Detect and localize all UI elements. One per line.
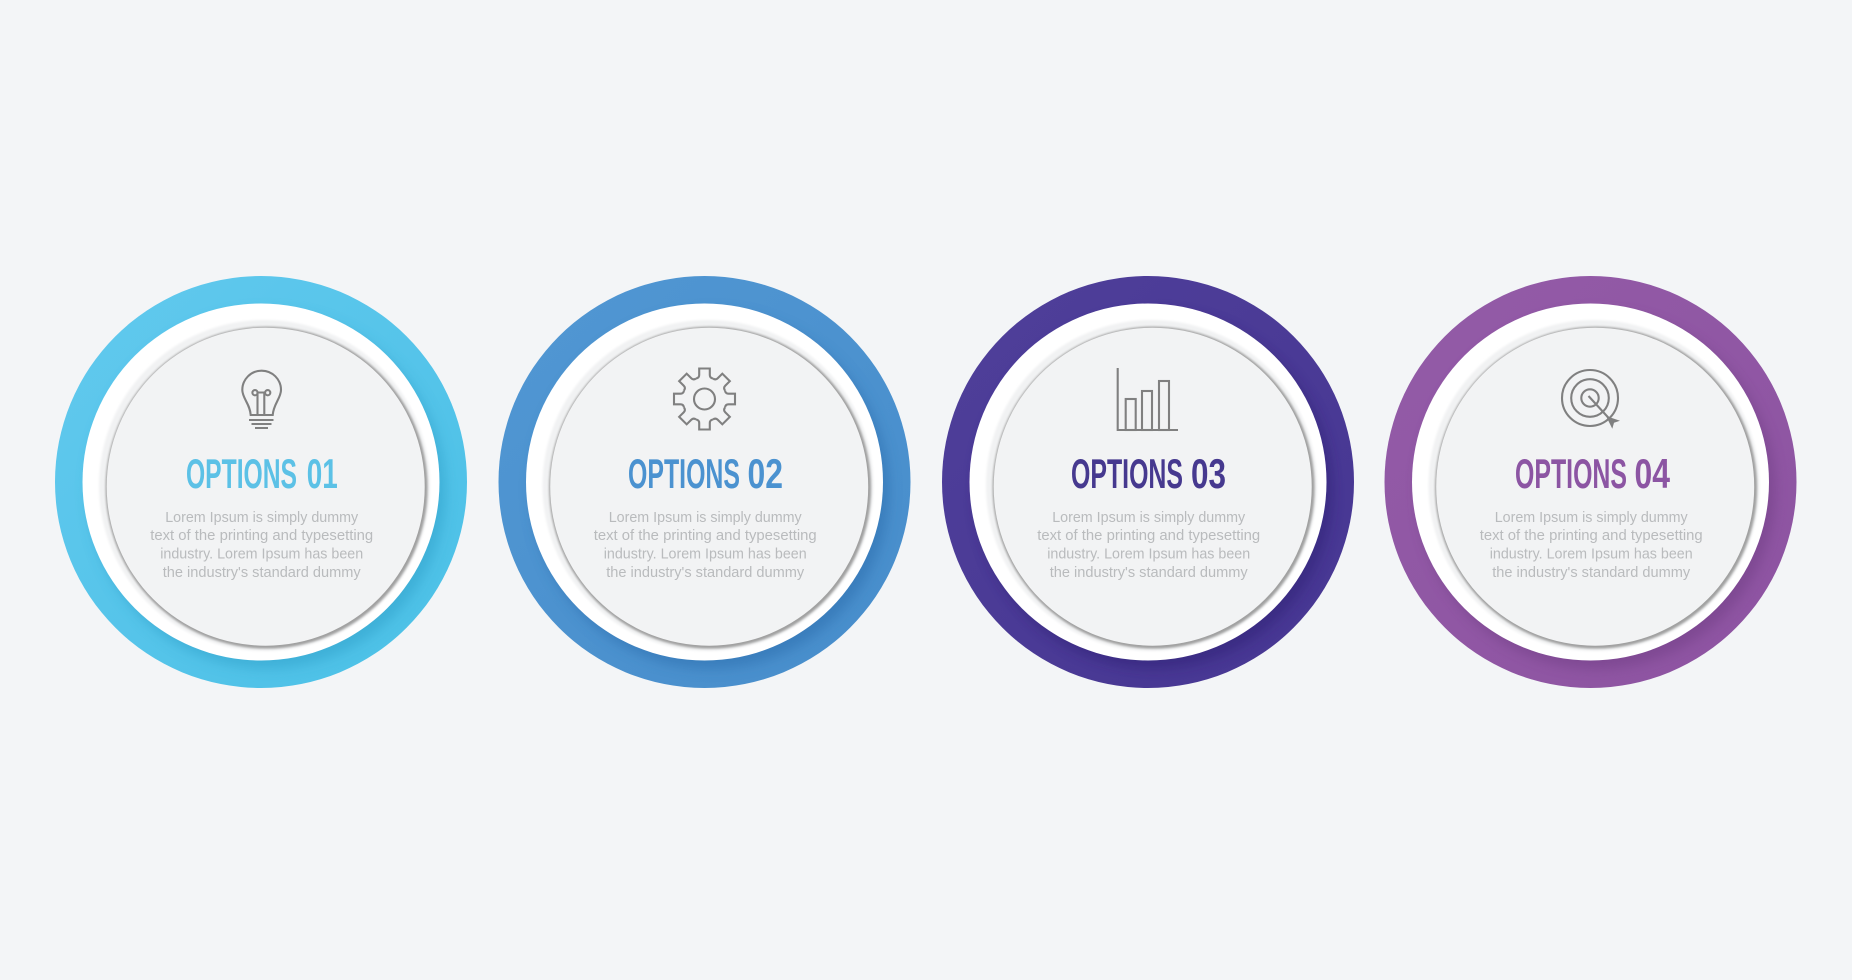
panel: options 04 xyxy=(1384,276,1796,688)
text block: the industry's standard dummy xyxy=(606,565,805,581)
outer ring xyxy=(942,276,1354,688)
inner circle xyxy=(1436,328,1754,646)
text block: text of the printing and typesetting xyxy=(150,528,373,544)
text block: text of the printing and typesetting xyxy=(1037,528,1260,544)
white disk xyxy=(82,304,440,660)
icon: gear xyxy=(674,368,735,430)
panel: options 03 xyxy=(942,276,1354,688)
text block: industry. Lorem Ipsum has been xyxy=(160,546,363,562)
heading: OPTIONS xyxy=(186,450,297,497)
inner circle xyxy=(550,328,868,646)
heading: OPTIONS xyxy=(1515,450,1627,497)
heading: 01 xyxy=(307,450,338,497)
inner circle xyxy=(107,328,425,646)
outer ring xyxy=(1384,276,1796,688)
heading: OPTIONS xyxy=(628,450,740,497)
icon: target xyxy=(1562,370,1620,429)
text block xyxy=(594,510,817,581)
white disk xyxy=(526,304,883,660)
text block: industry. Lorem Ipsum has been xyxy=(1490,546,1693,562)
heading: 04 xyxy=(1634,450,1670,497)
text block: text of the printing and typesetting xyxy=(594,528,817,544)
heading: 02 xyxy=(748,450,783,497)
text block: industry. Lorem Ipsum has been xyxy=(604,546,807,562)
text block: text of the printing and typesetting xyxy=(1480,528,1703,544)
text block: the industry's standard dummy xyxy=(163,565,361,581)
outer ring xyxy=(55,276,467,688)
text block: Lorem Ipsum is simply dummy xyxy=(1052,510,1246,526)
text block: Lorem Ipsum is simply dummy xyxy=(1495,510,1688,526)
heading: 03 xyxy=(1191,450,1226,497)
text block xyxy=(150,510,373,581)
white disk xyxy=(1412,304,1769,660)
text block: Lorem Ipsum is simply dummy xyxy=(165,510,359,526)
text block xyxy=(1480,510,1703,581)
heading: OPTIONS xyxy=(1071,450,1183,497)
text block: Lorem Ipsum is simply dummy xyxy=(609,510,802,526)
inner circle xyxy=(994,328,1312,646)
text block: the industry's standard dummy xyxy=(1050,565,1248,581)
text block xyxy=(1037,510,1260,581)
icon: light bulb xyxy=(242,371,281,428)
panel: options 02 xyxy=(498,276,910,688)
white disk xyxy=(970,304,1326,660)
icon: bar chart xyxy=(1118,368,1178,430)
text block: the industry's standard dummy xyxy=(1492,565,1691,581)
outer ring xyxy=(498,276,910,688)
text block: industry. Lorem Ipsum has been xyxy=(1047,546,1250,562)
panel: options 01 xyxy=(55,276,467,688)
